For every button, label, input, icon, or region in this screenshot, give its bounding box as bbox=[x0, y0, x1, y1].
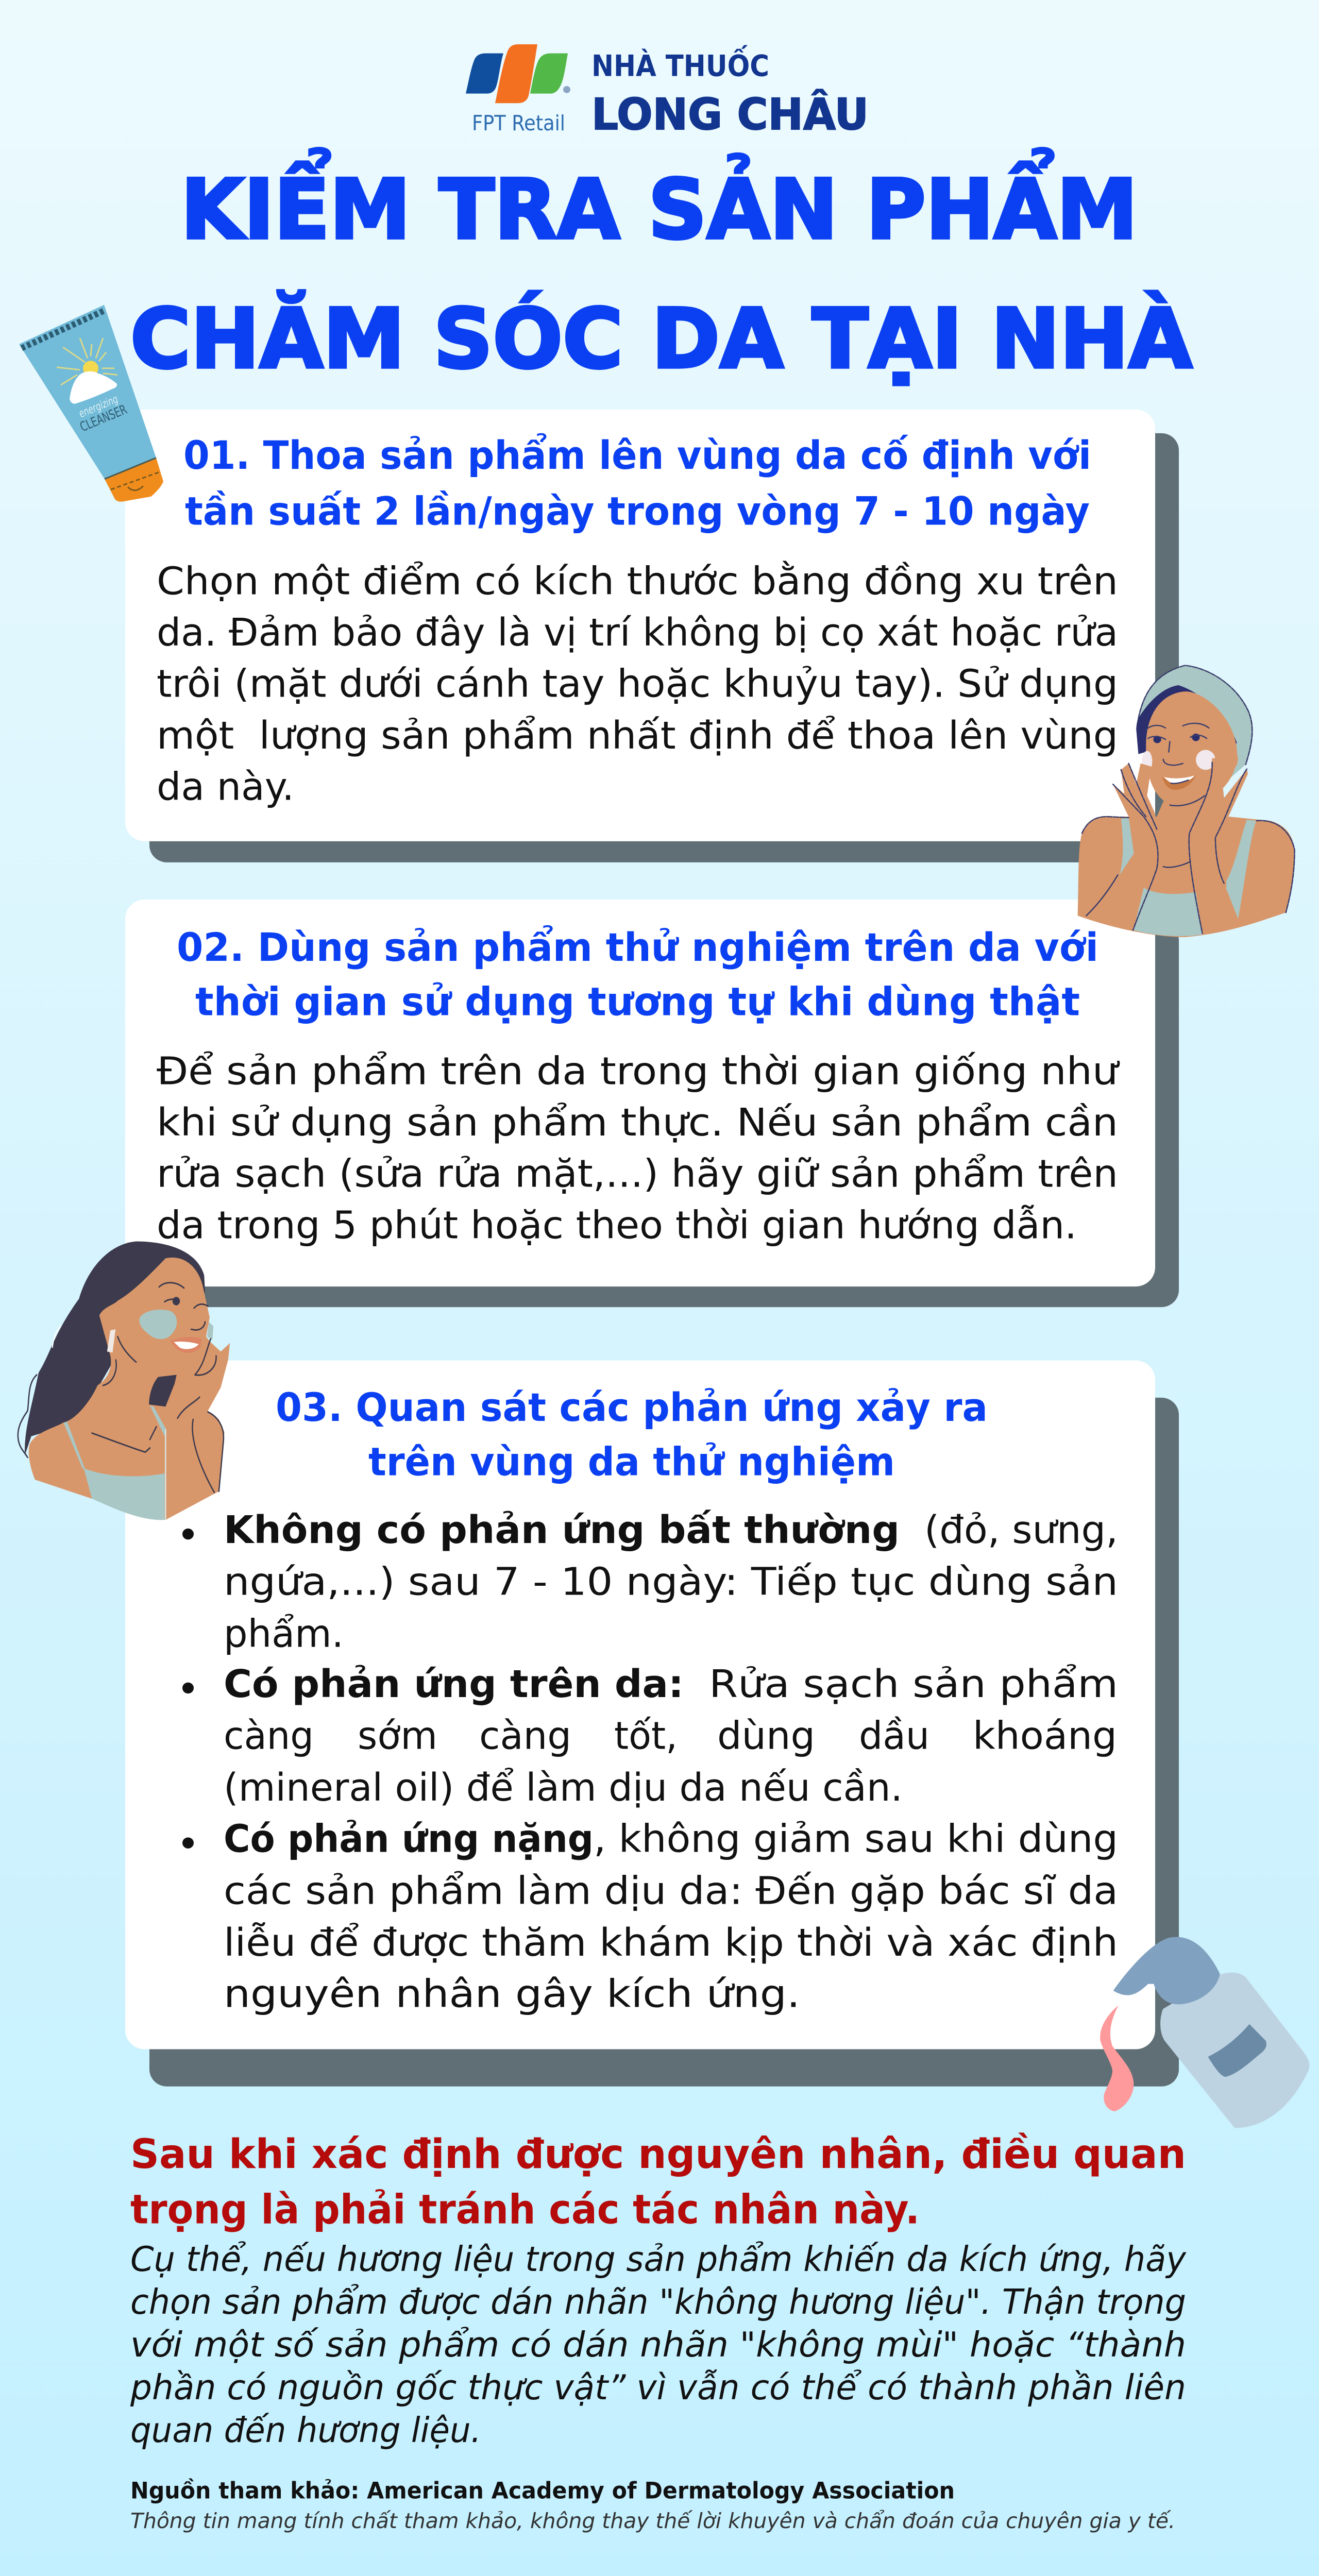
title: KIỂM TRA SẢN PHẨM bbox=[181, 148, 1138, 257]
step 01 heading: 01. Thoa sản phẩm lên vùng da cố định với bbox=[183, 433, 1091, 479]
head wrap bbox=[1138, 666, 1252, 785]
face bbox=[1146, 691, 1237, 807]
card bbox=[125, 900, 1155, 1286]
torso and arms bbox=[1078, 817, 1295, 937]
icon: sunscreen cleanser tube: CLEANSER bbox=[78, 402, 129, 435]
top bbox=[83, 1468, 165, 1520]
hands bbox=[1113, 764, 1160, 869]
panel: step 03 bbox=[125, 1361, 1179, 2087]
bullet: skin reaction: dầu bbox=[859, 1713, 929, 1758]
bullet: severe reaction: nguyên nhân gây kích ứng. bbox=[224, 1971, 800, 2016]
closing callout body text: với một số sản phẩm có dán nhãn "không mùi" hoặc “thành bbox=[130, 2325, 1186, 2365]
icon: sunscreen cleanser tube: energizing bbox=[77, 393, 120, 420]
source credit: Nguồn tham khảo: American Academy of Dermatology Association bbox=[130, 2477, 955, 2504]
bullet: skin reaction: Rửa sạch sản phẩm bbox=[709, 1662, 1118, 1706]
bullet: skin reaction: tốt, bbox=[614, 1713, 678, 1758]
title: CHĂM SÓC DA TẠI NHÀ bbox=[130, 291, 1192, 386]
card bbox=[125, 410, 1155, 841]
step 01 body text bbox=[157, 558, 1118, 809]
bullet: severe reaction: các sản phẩm làm dịu da: Đến gặp bác sĩ da bbox=[224, 1868, 1118, 1913]
step 01 body text: da. Đảm bảo đây là vị trí không bị cọ xát hoặc rửa bbox=[157, 610, 1118, 655]
step 01 body text: da này. bbox=[157, 765, 294, 809]
bullet: severe reaction: , không giảm sau khi dùng bbox=[594, 1817, 1118, 1861]
bottle label bbox=[1208, 2024, 1266, 2077]
step 01 body text: Chọn một điểm có kích thước bằng đồng xu trên bbox=[157, 558, 1118, 603]
panel: step 01 bbox=[125, 410, 1179, 862]
card shadow bbox=[149, 433, 1179, 862]
bullet: severe reaction bbox=[182, 1817, 1118, 2016]
disclaimer: Thông tin mang tính chất tham khảo, không thay thế lời khuyên và chẩn đoán của chuyên gia y tế. bbox=[130, 2509, 1175, 2533]
card shadow bbox=[149, 923, 1179, 1307]
illustration: woman with head wrap washing her face bbox=[1078, 666, 1295, 937]
hair bbox=[1136, 684, 1238, 754]
facial features bbox=[1146, 723, 1209, 790]
bullet: skin reaction bbox=[182, 1662, 1118, 1810]
facial features and body lines bbox=[92, 1283, 224, 1519]
step 01 body text: một lượng sản phẩm nhất định để thoa lên vùng bbox=[157, 713, 1118, 758]
title bbox=[130, 148, 1192, 386]
skin bbox=[29, 1258, 230, 1520]
logo caption: FPT Retail bbox=[472, 110, 565, 135]
closing callout heading: Sau khi xác định được nguyên nhân, điều quan bbox=[130, 2131, 1186, 2178]
bullet: skin reaction: càng bbox=[479, 1713, 571, 1758]
tank top bbox=[1134, 888, 1203, 936]
step 02 body text: khi sử dụng sản phẩm thực. Nếu sản phẩm cần bbox=[157, 1100, 1118, 1145]
bullet: no abnormal reaction: Không có phản ứng bất thường bbox=[224, 1507, 900, 1552]
card shadow bbox=[149, 1398, 1179, 2087]
bullet: skin reaction: càng bbox=[224, 1713, 314, 1758]
pink drip bbox=[1100, 2005, 1134, 2111]
bullet: skin reaction: khoáng bbox=[973, 1713, 1117, 1758]
arm and hand lines bbox=[1082, 762, 1295, 934]
hair strands bbox=[18, 1375, 37, 1458]
step 02 body text: Để sản phẩm trên da trong thời gian giống như bbox=[157, 1048, 1120, 1093]
icon: FPT three stripes bbox=[466, 44, 570, 103]
logo line two: LONG CHÂU bbox=[591, 89, 869, 140]
closing callout body text: quan đến hương liệu. bbox=[130, 2411, 481, 2450]
bottle body bbox=[1160, 1973, 1309, 2128]
step 01 body text: trôi (mặt dưới cánh tay hoặc khuỷu tay). Sử dụng bbox=[157, 661, 1118, 706]
closing callout body text: phần có nguồn gốc thực vật” vì vẫn có thể có thành phần liên bbox=[130, 2368, 1186, 2408]
icon: sunscreen cleanser tube bbox=[19, 305, 163, 502]
illustration: woman applying clay mask bbox=[18, 1242, 230, 1520]
bullet: skin reaction: sớm bbox=[358, 1713, 437, 1758]
bullet: severe reaction: Có phản ứng nặng bbox=[224, 1817, 594, 1861]
step 02 body text: da trong 5 phút hoặc theo thời gian hướng dẫn. bbox=[157, 1202, 1077, 1247]
closing callout body text bbox=[130, 2240, 1187, 2450]
bullet: severe reaction: liễu để được thăm khám kịp thời và xác định bbox=[224, 1920, 1118, 1965]
step 03 heading: 03. Quan sát các phản ứng xảy ra bbox=[276, 1385, 988, 1431]
bullet: no abnormal reaction: (đỏ, sưng, bbox=[924, 1507, 1118, 1552]
closing callout body text: Cụ thể, nếu hương liệu trong sản phẩm khiến da kích ứng, hãy bbox=[130, 2240, 1187, 2279]
step 03 heading bbox=[276, 1385, 988, 1485]
closing callout heading bbox=[130, 2131, 1186, 2233]
earring bbox=[107, 1329, 115, 1352]
step 02 heading: 02. Dùng sản phẩm thử nghiệm trên da với bbox=[177, 925, 1098, 971]
icon: pump bottle with pink drip bbox=[1100, 1937, 1309, 2128]
foam bbox=[1196, 750, 1215, 770]
bullet: skin reaction: dùng bbox=[717, 1713, 815, 1758]
step 02 heading bbox=[177, 925, 1098, 1025]
logo: FPT Retail Nhà thuốc Long Châu bbox=[466, 44, 869, 140]
pump head bbox=[1113, 1937, 1220, 2004]
card bbox=[125, 1361, 1155, 2049]
step 02 heading: thời gian sử dụng tương tự khi dùng thật bbox=[195, 979, 1080, 1025]
panel: step 02 bbox=[125, 900, 1179, 1307]
clay mask bbox=[139, 1310, 177, 1339]
bullet: skin reaction: Có phản ứng trên da: bbox=[224, 1662, 684, 1706]
neck bbox=[1153, 791, 1228, 888]
bullet: no abnormal reaction: ngứa,...) sau 7 - 10 ngày: Tiếp tục dùng sản bbox=[224, 1560, 1118, 1604]
step 02 body text bbox=[157, 1048, 1120, 1247]
logo line one: NHÀ THUỐC bbox=[591, 45, 769, 83]
closing callout body text: chọn sản phẩm được dán nhãn "không hương liệu". Thận trọng bbox=[130, 2282, 1186, 2322]
closing callout heading: trọng là phải tránh các tác nhân này. bbox=[130, 2186, 920, 2233]
bullet: skin reaction: (mineral oil) để làm dịu da nếu cần. bbox=[224, 1765, 903, 1810]
hair under chin bbox=[149, 1375, 177, 1406]
step 02 body text: rửa sạch (sửa rửa mặt,...) hãy giữ sản phẩm trên bbox=[157, 1151, 1118, 1196]
bullet: no abnormal reaction: phẩm. bbox=[224, 1611, 344, 1656]
long hair bbox=[25, 1242, 205, 1455]
step 01 heading: tần suất 2 lần/ngày trong vòng 7 - 10 ngày bbox=[185, 488, 1090, 534]
step 01 heading bbox=[183, 433, 1091, 534]
bullet: no abnormal reaction bbox=[182, 1507, 1118, 1656]
step 03 heading: trên vùng da thử nghiệm bbox=[368, 1439, 895, 1485]
ear bbox=[1224, 750, 1238, 771]
